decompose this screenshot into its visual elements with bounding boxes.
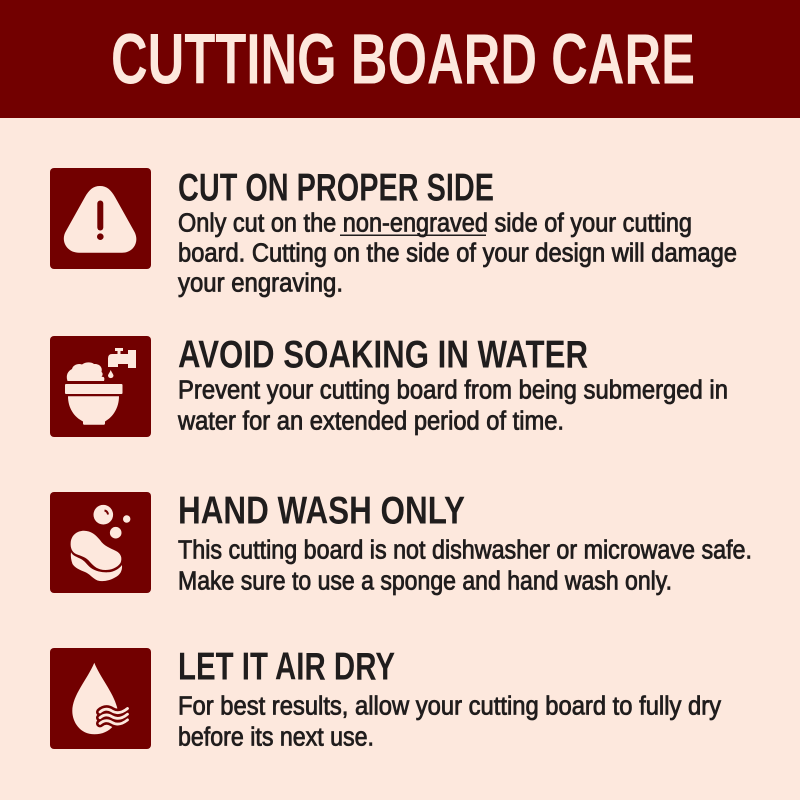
body text: For best results, allow your cutting board to fully dry [178, 692, 721, 720]
body text: This cutting board is not dishwasher or microwave safe. [178, 536, 752, 564]
icon: warning triangle [50, 168, 151, 269]
body text: your engraving. [178, 270, 343, 298]
heading: HAND WASH ONLY [178, 490, 465, 532]
panel: cut on proper side [50, 166, 737, 298]
body text: Prevent your cutting board from being submerged in [178, 376, 728, 404]
body text: Make sure to use a sponge and hand wash only. [178, 568, 672, 596]
icon: water drop with air waves [50, 648, 151, 749]
heading: CUT ON PROPER SIDE [178, 166, 494, 210]
panel: let it air dry [50, 646, 721, 752]
panel: avoid soaking in water [50, 334, 728, 437]
body text [177, 376, 728, 436]
body text: water for an extended period of time. [177, 408, 564, 436]
body text: Only cut on the non-engraved side of your cutting [178, 210, 692, 238]
icon: sponge and bubbles [50, 492, 151, 593]
panel: hand wash only [50, 490, 752, 596]
heading: LET IT AIR DRY [178, 646, 395, 688]
heading: AVOID SOAKING IN WATER [178, 334, 588, 376]
body text [178, 210, 737, 298]
body text [178, 536, 752, 596]
icon: bowl under tap [50, 336, 151, 437]
body text [178, 692, 721, 752]
title banner [0, 0, 800, 118]
body text: board. Cutting on the side of your design will damage [178, 240, 737, 268]
body text: before its next use. [178, 724, 374, 752]
